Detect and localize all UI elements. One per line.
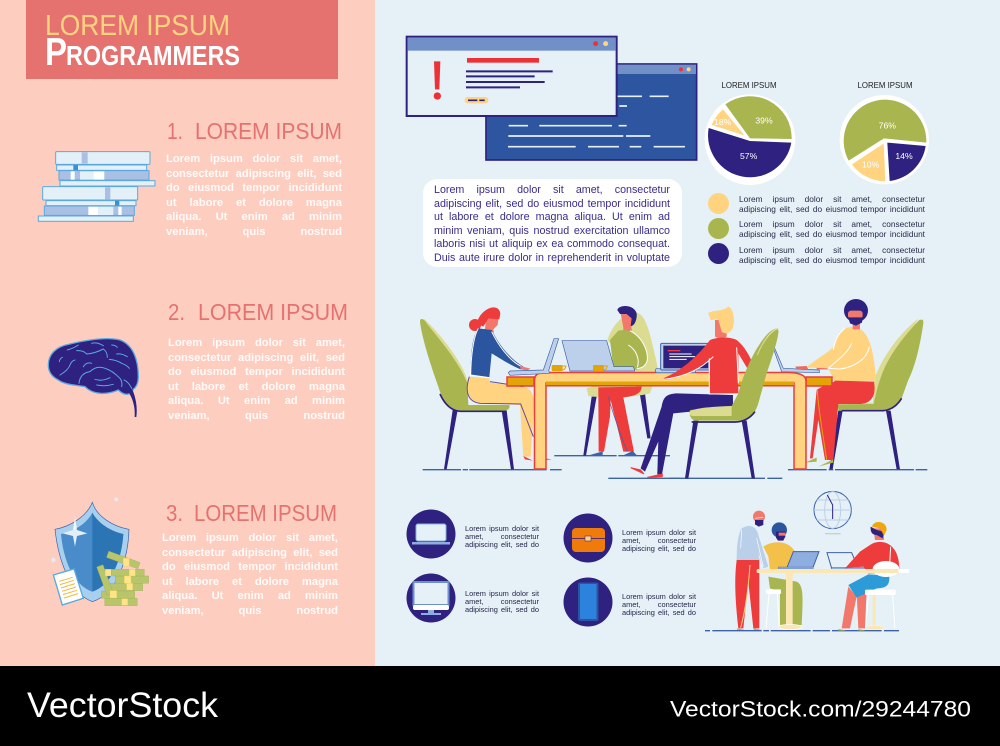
illustration: code windows xyxy=(406,36,698,161)
pie chart 1: LOREM IPSUM xyxy=(722,80,777,90)
text block 3: ut labore et dolore magna xyxy=(162,576,338,588)
small text 1 xyxy=(465,524,539,549)
white text card: Lorem ipsum dolor sit amet, consectetur xyxy=(434,184,670,196)
pie chart 1: 39% xyxy=(755,115,773,125)
pie chart 2: 76% xyxy=(879,120,896,130)
text block 1 xyxy=(166,153,342,238)
title banner xyxy=(26,0,338,79)
title: LOREM IPSUM xyxy=(45,10,230,42)
white text card: laboris nisi ut aliquip ex ea commodo consequat. xyxy=(434,238,670,250)
icon: monitor xyxy=(406,574,456,622)
pie chart 1: 18% xyxy=(714,117,732,127)
legend item: green: Lorem ipsum dolor sit amet, consectetur xyxy=(739,219,925,229)
pie chart 2: 10% xyxy=(862,159,880,169)
pie chart 2: 14% xyxy=(895,151,913,161)
legend item: green xyxy=(708,218,925,239)
small text 1: adipiscing elit, sed do xyxy=(465,540,539,549)
small text 3 xyxy=(622,528,696,553)
legend item: yellow: Lorem ipsum dolor sit amet, consectetur xyxy=(739,194,925,204)
text block 1: consectetur adipiscing elit, sed xyxy=(166,168,342,180)
footer logo and URL: VectorStock.com/29244780 xyxy=(670,696,971,722)
white text card: adipiscing elit, sed do eiusmod tempor incididunt xyxy=(434,198,670,210)
text block 3: do eiusmod tempor incididunt xyxy=(162,561,338,573)
heading 1: 1. xyxy=(167,118,183,144)
text block 3: Lorem ipsum dolor sit amet, xyxy=(162,532,338,544)
text block 1: ut labore et dolore magna xyxy=(166,196,342,208)
legend item: yellow xyxy=(708,193,925,214)
icon: shield with money and document xyxy=(51,497,149,606)
legend item: yellow: adipiscing elit, sed do eiusmod tempor incididunt xyxy=(739,204,925,214)
text block 3: veniam, quis nostrud xyxy=(162,604,338,616)
small text 4: amet, consectetur xyxy=(622,600,696,609)
section 2 xyxy=(48,299,348,422)
text block 2: aliqua. Ut enim ad minim xyxy=(168,395,345,407)
heading 3: 3. xyxy=(166,500,183,526)
legend item: navy: Lorem ipsum dolor sit amet, consectetur xyxy=(739,245,925,255)
white text card: minim veniam, quis nostrud exercitation ullamco xyxy=(434,225,670,237)
pie chart 2 xyxy=(840,80,929,184)
small text 4 xyxy=(622,592,696,617)
legend xyxy=(708,193,925,265)
text block 3 xyxy=(162,532,338,616)
text block 1: do eiusmod tempor incididunt xyxy=(166,182,342,194)
text block 2: ut labore et dolore magna xyxy=(168,380,345,392)
legend item: navy: adipiscing elit, sed do eiusmod tempor incididunt xyxy=(739,255,925,265)
small text 2: Lorem ipsum dolor sit xyxy=(465,589,539,598)
small text 3: amet, consectetur xyxy=(622,536,696,545)
footer logo and URL: VectorStock xyxy=(27,686,219,725)
small text 2 xyxy=(465,589,539,614)
icon: phone xyxy=(564,578,612,626)
title xyxy=(45,10,240,74)
small text 3: adipiscing elit, sed do xyxy=(622,544,696,553)
text block 1: veniam, quis nostrud xyxy=(166,226,342,238)
section 3 xyxy=(51,497,338,616)
legend item: green: adipiscing elit, sed do eiusmod tempor incididunt xyxy=(739,229,925,239)
small text 4: Lorem ipsum dolor sit xyxy=(622,592,696,601)
illustration: team at the table xyxy=(420,299,928,479)
right panel xyxy=(375,0,1000,666)
small text 2: amet, consectetur xyxy=(465,597,539,606)
pie charts xyxy=(704,80,929,185)
footer bar xyxy=(0,666,1000,746)
text block 1: aliqua. Ut enim ad minim xyxy=(166,211,342,223)
section 1 xyxy=(38,118,342,238)
text block 3: consectetur adipiscing elit, sed xyxy=(162,546,338,558)
text block 1: Lorem ipsum dolor sit amet, xyxy=(166,153,342,165)
text block 2 xyxy=(168,337,345,422)
text block 2: veniam, quis nostrud xyxy=(168,410,345,422)
heading 1: LOREM IPSUM xyxy=(195,118,342,144)
footer logo and URL xyxy=(27,686,971,725)
text block 3: aliqua. Ut enim ad minim xyxy=(162,590,338,602)
icon: books xyxy=(38,151,156,222)
small text 4: adipiscing elit, sed do xyxy=(622,608,696,617)
heading 3: LOREM IPSUM xyxy=(194,500,337,526)
white text card: ut labore et dolore magna aliqua. Ut enim ad xyxy=(434,211,670,223)
text block 2: Lorem ipsum dolor sit amet, xyxy=(168,337,345,349)
pie chart 1: 57% xyxy=(740,151,758,161)
icon: laptop xyxy=(406,510,456,558)
pie chart 1 xyxy=(705,80,795,185)
icon: briefcase xyxy=(564,514,612,562)
pie chart 2: LOREM IPSUM xyxy=(858,80,913,90)
laptop with code xyxy=(661,343,711,370)
table xyxy=(507,372,832,469)
text block 2: consectetur adipiscing elit, sed xyxy=(168,352,345,364)
icon: brain xyxy=(48,338,139,417)
small text 1: Lorem ipsum dolor sit xyxy=(465,524,539,533)
legend item: navy xyxy=(708,243,925,265)
small text 3: Lorem ipsum dolor sit xyxy=(622,528,696,537)
text block 2: do eiusmod tempor incididunt xyxy=(168,366,345,378)
left panel xyxy=(0,0,375,666)
illustration: small meeting xyxy=(705,490,910,632)
heading 2: LOREM IPSUM xyxy=(198,299,348,325)
heading 2: 2. xyxy=(168,299,185,325)
white text card xyxy=(423,179,682,267)
title: P xyxy=(45,31,67,74)
title: ROGRAMMERS xyxy=(66,40,240,71)
small text 1: amet, consectetur xyxy=(465,532,539,541)
white text card: Duis aute irure dolor in reprehenderit in voluptate xyxy=(434,252,670,264)
small text 2: adipiscing elit, sed do xyxy=(465,605,539,614)
